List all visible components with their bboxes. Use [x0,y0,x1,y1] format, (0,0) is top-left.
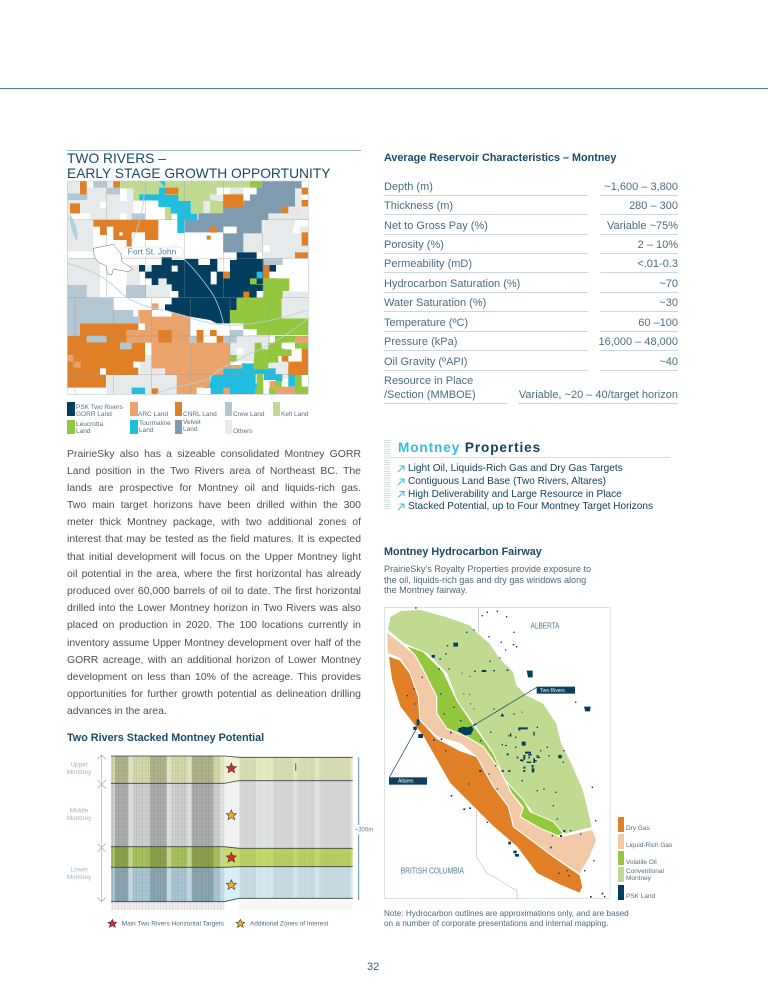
tourmaline [139,181,197,233]
legend: land: Tourmaline [139,420,171,427]
fairway description: PrairieSky’s Royalty Properties provide exposure to [384,564,591,574]
body paragraph: advances in the area. [67,706,167,717]
body paragraph: PrairieSky also has a sizeable consolidated Montney GORR [67,448,361,460]
map note: on a number of corporate presentations and internal mapping. [384,919,608,928]
reservoir table: Depth (m) [384,180,433,192]
callout: Altares: Altares [398,779,414,785]
reservoir table: ~40 [659,356,678,368]
chart legend [122,920,329,927]
300m bracket [353,757,374,900]
zone labels: Middle [70,807,89,814]
reservoir table: Net to Gross Pay (%) [384,220,488,232]
map note: Note: Hydrocarbon outlines are approximations only, and are based [384,909,629,918]
body paragraph: placed on production in 2020. The 100 locations currently in [67,620,361,631]
body paragraph: opportunities for further growth potential as delineation drilling [67,689,361,700]
dry gas [388,656,583,893]
reservoir table: /Section (MMBOE) [384,388,476,400]
body paragraph: development on less than 10% of the acreage. This provides [67,672,361,683]
fairway description: the Montney fairway. [384,585,467,595]
grid lines [67,181,308,394]
zone labels [67,762,92,881]
body paragraph: Two main target horizons have been drilled within the 300 [67,500,361,511]
reservoir table: Variable ~75% [607,220,678,232]
legend: land: CNRL Land [183,411,217,418]
left panel colours [111,756,224,910]
callout: Two Rivers [473,687,575,726]
bullet list: Contiguous Land Base (Two Rivers, Altares) [408,476,606,487]
map note [384,909,629,928]
legend: land: GORR Land [76,411,112,418]
province labels: BRITISH COLUMBIA [401,866,465,875]
zone labels: Montney [67,874,92,881]
volatile oil [405,645,563,837]
reservoir table: ~30 [659,296,678,308]
stacked Montney log chart [67,754,374,928]
velvet [185,181,302,252]
zone labels: Montney [67,815,92,822]
liquid-rich gas [387,632,597,874]
reservoir table: Oil Gravity (ºAPI) [384,356,467,368]
zone arrows [97,755,106,902]
province labels: ALBERTA [531,621,560,630]
cnrl [67,323,145,388]
reservoir table: Variable, ~20 – 40/target horizon [519,388,678,400]
body paragraph: inventory assume Upper Montney development over half of the [67,638,361,649]
bullet list: Stacked Potential, up to Four Montney Target Horizons [408,501,653,512]
centre connector band [224,757,239,902]
legend: fairway [618,817,672,900]
province labels [401,621,560,875]
reservoir table: Hydrocarbon Saturation (%) [384,278,520,290]
heading: reservoir characteristics: Average Reservoir Characteristics – Montney [384,152,616,164]
legend: land: Land [139,427,153,434]
right panel colours [239,757,353,910]
reservoir table: 60 –100 [638,316,678,328]
legend: land: Land [76,428,90,435]
body paragraph: produced over 60,000 barrels of oil to date. The first horizontal [67,586,361,597]
legend: land: PSK Two Rivers [76,404,123,411]
bullet list: High Deliverability and Large Resource in Place [408,488,622,500]
body paragraph: interest that may be tested as the field matures. It is expected [67,534,361,545]
fairway description: the oil, liquids-rich gas and dry gas windows along [384,574,586,584]
reservoir table: Resource in Place [384,374,473,386]
land map [67,180,309,395]
Fort St. John outline [93,244,133,275]
body paragraph: oil potential in the area, where the first horizontal has already [67,569,361,580]
reservoir table [384,180,678,404]
bullet list: Light Oil, Liquids-Rich Gas and Dry Gas Targets [408,463,623,474]
fairway map [384,607,610,899]
title [67,151,330,180]
legend: land: ARC Land [138,411,168,418]
legend: land: Land [183,426,197,433]
zone labels: Lower [70,867,88,874]
legend: fairway: Liquid-Rich Gas [626,842,672,849]
legend: land [67,402,308,435]
callout: Two Rivers: Two Rivers [540,688,565,694]
legend: land: Crew Land [233,411,264,418]
legend: land: Velvet [183,419,201,426]
legend: land: Others [233,428,253,435]
fairway description [384,564,591,595]
PSK land dots [407,607,605,898]
panel: Montney properties [384,440,670,512]
heading: stacked potential: Two Rivers Stacked Montney Potential [67,732,264,744]
legend: fairway: PSK Land [626,893,655,900]
bullet list [398,463,653,512]
legend: fairway: Volatile Oil [626,859,657,866]
kelt [120,181,250,220]
heading: hydrocarbon fairway: Montney Hydrocarbon Fairway [384,546,542,558]
body paragraph: GORR acreage, with an additional horizon of Lower Montney [67,655,361,666]
legend: land: Kelt Land [281,411,308,418]
legend: fairway: Montney [626,875,651,882]
conventional Montney [387,609,592,835]
300m bracket: ~300m [355,827,374,834]
reservoir table: ~70 [659,278,678,290]
zone boundary lines [111,756,353,902]
reservoir table: Permeability (mD) [384,258,472,270]
body paragraph: meter thick Montney package, with two additional zones of [67,517,361,528]
body paragraph: lands are prospective for Montney oil and liquids-rich gas. [67,483,361,494]
callout: Altares [389,728,427,785]
rivers [67,181,308,393]
decorative tab [384,440,390,510]
body paragraph: drilled into the Lower Montney horizon in Two Rivers was also [67,603,361,614]
reservoir table: Water Saturation (%) [384,296,486,308]
psk [139,252,276,323]
body paragraph: Land position in the Two Rivers area of Northeast BC. The [67,466,361,477]
title: TWO RIVERS – [67,151,166,166]
header rule [0,88,768,89]
reservoir table: Pressure (kPa) [384,336,457,348]
legend: fairway: Conventional [626,868,664,875]
chart legend: Main Two Rivers Horizontal Targets [122,920,225,927]
body paragraph: that initial development will focus on the Upper Montney light [67,552,361,563]
reservoir table: 16,000 – 48,000 [598,336,678,348]
title: EARLY STAGE GROWTH OPPORTUNITY [67,166,330,180]
zone labels: Montney [67,769,92,776]
legend: fairway: Dry Gas [626,825,650,832]
reservoir table: Thickness (m) [384,200,453,212]
reservoir table: 2 – 10% [638,238,678,250]
leucrotta [230,278,308,394]
reservoir table: Porosity (%) [384,238,444,250]
legend: land: Leucrotta [76,421,103,428]
crew [67,181,283,349]
reservoir table: Temperature (ºC) [384,316,468,328]
reservoir table: <.01-0.3 [637,258,678,270]
reservoir table: 280 – 300 [629,200,678,212]
body paragraph [67,448,362,717]
Fort St. John label: Fort St. John [128,247,177,257]
stars [108,763,245,927]
zone labels: Upper [70,762,88,769]
chart legend: Additional Zones of Interest [250,920,329,927]
properties heading: Montney Properties [398,440,541,455]
arc [127,310,243,394]
reservoir table: ~1,600 – 3,800 [604,180,678,192]
section rule [67,150,361,151]
page number: 32 [367,961,379,973]
